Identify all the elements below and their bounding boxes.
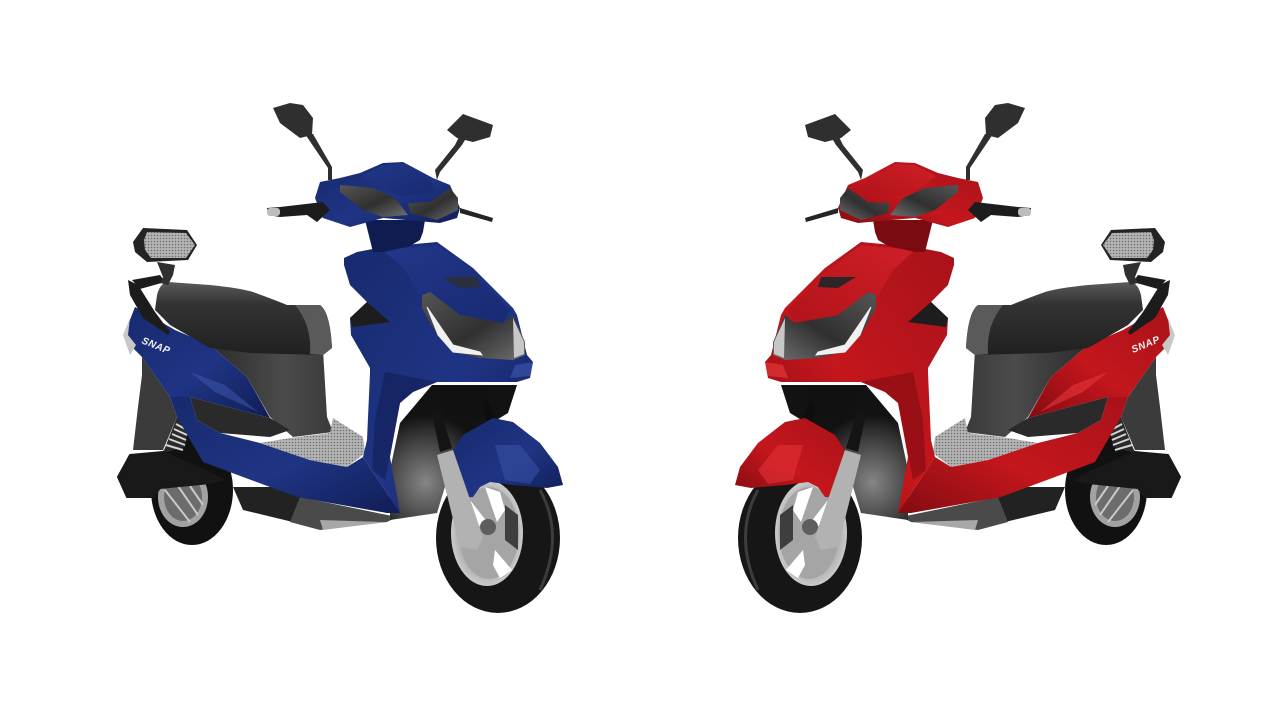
fork lower [437,450,483,550]
rear panel highlight [190,372,258,412]
front tyre [436,463,560,613]
rear engine block [1121,357,1165,450]
underbody silver edge [320,520,385,530]
cowl right lens [408,188,458,220]
front shield [344,242,533,513]
rear hugger and muffler [118,452,223,497]
tail silver trim [123,318,136,355]
front fender [735,418,846,498]
cowl [838,162,983,227]
right brake lever [460,208,493,222]
left handlebar [267,202,330,222]
left mirror [273,103,332,180]
main headlight [773,292,876,360]
left handlebar [968,202,1031,222]
left mirror [966,103,1025,180]
fork lower [815,450,861,550]
underbody grey panel [901,497,1008,530]
right mirror [805,114,863,180]
tyre tread line [746,490,758,590]
black frame stripes [435,388,490,420]
front fender [452,418,563,498]
inner black scoop [1008,397,1108,437]
shield dark notch [350,302,390,327]
lower body strip [170,397,400,513]
backrest stem [1123,262,1141,285]
centre grey tunnel [965,345,1088,437]
underbody mechanicals [233,487,323,523]
rear hugger and muffler [1075,452,1180,497]
underbody silver edge [913,520,978,530]
right mirror [435,114,493,180]
second fork [803,400,818,423]
shield vent [442,277,480,288]
shield vent [818,277,856,288]
lower body strip [898,397,1128,513]
right brake lever [805,208,838,222]
main headlight [422,292,525,360]
rear wheel [151,435,233,545]
grab rail [128,275,170,335]
inner black scoop [190,397,290,437]
rear wheel [1065,435,1147,545]
rear panel highlight [1040,372,1108,412]
cowl left lens [340,185,408,217]
cowl [315,162,460,227]
shield dark notch [908,302,948,327]
backrest [133,228,197,262]
cowl right lens [840,188,890,220]
neck [365,220,425,252]
black frame stripes [808,388,863,420]
fork upper [432,410,452,452]
tail silver trim [1162,318,1175,355]
tyre tread line [540,490,552,590]
fork upper [846,410,866,452]
SNAP badge: SNAP [1130,334,1162,356]
cowl left lens [890,185,958,217]
backrest stem [157,262,175,285]
seat [966,282,1143,355]
SNAP badge: SNAP [140,336,172,357]
floorboard [933,418,1038,467]
wheel arch interior [390,385,517,520]
backrest [1101,228,1165,262]
front rim [451,480,523,586]
front shield [765,242,954,513]
front rim [775,480,847,586]
rear body panel [1028,307,1172,418]
seat [155,282,332,355]
front tyre [738,463,862,613]
rear engine block [133,357,177,450]
centre grey tunnel [210,345,333,437]
underbody mechanicals [975,487,1065,523]
wheel arch interior [781,385,908,520]
scooter: blue [118,103,563,613]
rear suspension spring [163,417,188,453]
rear suspension spring [1110,417,1135,453]
second fork [480,400,495,423]
rear body panel [126,307,270,418]
neck [873,220,933,252]
grab rail [1128,275,1170,335]
scooter: red [735,103,1180,613]
underbody grey panel [290,497,397,530]
floorboard [260,418,365,467]
mirrored scooter drawing [735,103,1180,613]
